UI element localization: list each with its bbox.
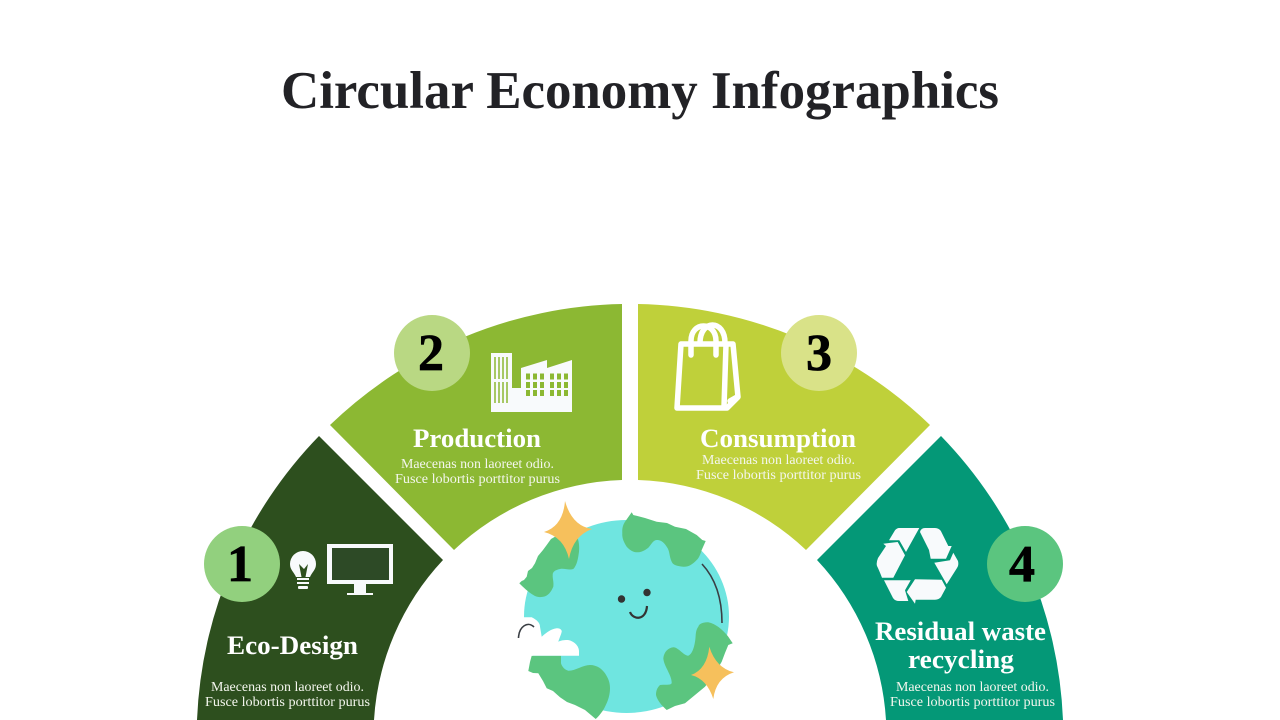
heading: Residual waste recycling: Residual waste xyxy=(875,617,1046,646)
text: consumption description xyxy=(696,452,861,482)
segment 1 shape xyxy=(197,436,443,720)
heading: Residual waste recycling xyxy=(875,617,1046,674)
number badge 4: 4 xyxy=(1009,536,1035,593)
continent: top xyxy=(622,512,706,567)
face xyxy=(618,589,651,618)
icon: recycling arrows xyxy=(877,528,958,604)
text: recycling description: Fusce lobortis porttitor purus xyxy=(890,694,1055,709)
cloud xyxy=(505,617,579,656)
globe ocean xyxy=(524,520,729,713)
icon: shopping bag xyxy=(677,325,738,408)
text: eco-design description: Fusce lobortis porttitor purus xyxy=(205,694,370,709)
icon: factory xyxy=(491,353,572,412)
number badge 3 xyxy=(781,315,857,391)
heading: Consumption: Consumption xyxy=(700,424,857,453)
segment 3 shape xyxy=(638,304,930,550)
star: lower xyxy=(691,647,734,699)
globe highlight lines xyxy=(518,564,722,638)
text: consumption description: Fusce lobortis porttitor purus xyxy=(696,467,861,482)
text: production description xyxy=(395,456,560,486)
number badge 4 xyxy=(987,526,1063,602)
text: production description: Fusce lobortis porttitor purus xyxy=(395,471,560,486)
number badge 2 xyxy=(394,315,470,391)
number badge 1: 1 xyxy=(227,536,253,593)
number badge 3: 3 xyxy=(806,325,832,382)
segment 2 shape xyxy=(330,304,622,550)
illustration: smiling globe xyxy=(505,501,734,719)
segment 4 shape xyxy=(817,436,1063,720)
panel: consumption xyxy=(638,304,930,550)
heading: Production: Production xyxy=(413,424,542,453)
text: eco-design description xyxy=(205,679,370,709)
text: recycling description xyxy=(890,679,1055,709)
continent: bottom right xyxy=(656,622,733,710)
number badge 2: 2 xyxy=(418,325,444,382)
icon: monitor xyxy=(327,544,393,595)
continent: bottom left xyxy=(528,656,610,719)
panel: residual waste recycling xyxy=(817,436,1063,720)
heading: Residual waste recycling: recycling xyxy=(908,645,1014,674)
icon: light bulb xyxy=(290,551,316,589)
panel: eco-design xyxy=(197,436,443,720)
panel: production xyxy=(330,304,622,550)
number badge 1 xyxy=(204,526,280,602)
text: production description: Maecenas non laoreet odio. xyxy=(401,456,554,471)
text: consumption description: Maecenas non laoreet odio. xyxy=(702,452,855,467)
heading: Eco-Design: Eco-Design xyxy=(227,631,359,660)
continent: left xyxy=(519,536,579,597)
text: eco-design description: Maecenas non laoreet odio. xyxy=(211,679,364,694)
text: recycling description: Maecenas non laoreet odio. xyxy=(896,679,1049,694)
star: upper xyxy=(544,501,592,559)
title: Circular Economy Infographics xyxy=(281,62,999,120)
